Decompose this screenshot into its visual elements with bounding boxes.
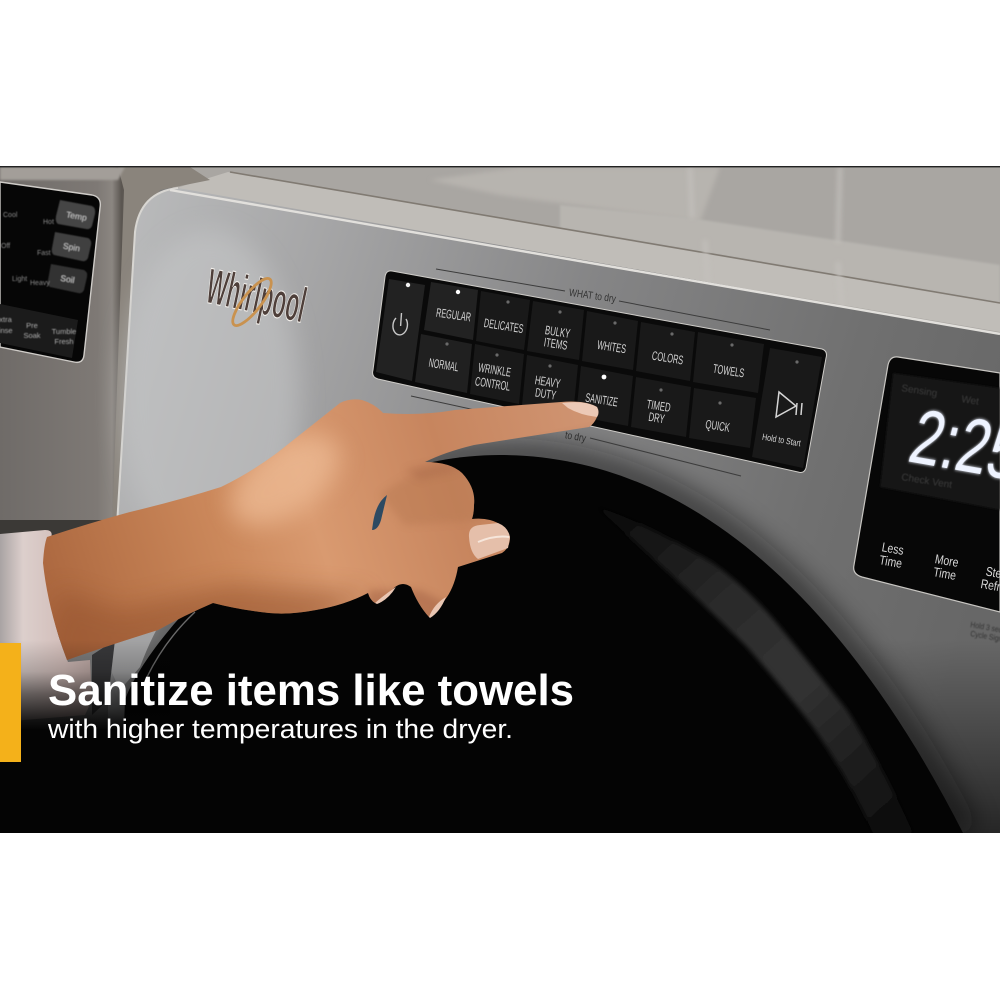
button labels: TOWELS (712, 363, 745, 381)
dryer front panel (108, 188, 1000, 833)
button labels: SANITIZE (584, 392, 619, 410)
Whirlpool logo (208, 268, 308, 327)
display buttons: Less (881, 540, 905, 558)
button labels: DUTY (534, 387, 557, 403)
pointing fingernail (562, 402, 598, 417)
button labels: REGULAR (435, 307, 472, 325)
Temp button (56, 200, 95, 229)
thin door line (147, 612, 195, 677)
display buttons (880, 542, 1000, 591)
display panel (854, 357, 1000, 645)
status labels: Check Vent (901, 472, 953, 491)
photo panel: dryer control close-up (0, 167, 1000, 833)
button labels: DELICATES (483, 317, 524, 337)
button labels (428, 307, 745, 435)
curled finger nails (429, 597, 446, 618)
button labels: NORMAL (428, 357, 460, 375)
marble countertop (170, 167, 1000, 340)
headline: Sanitize items like towels (48, 666, 574, 715)
washer lower buttons: Tumble (52, 327, 76, 336)
hand shadow (40, 585, 370, 690)
display buttons: Time (932, 565, 957, 583)
button labels: COLORS (651, 350, 684, 368)
how to dry legend (411, 396, 741, 476)
washer labels (1, 212, 54, 287)
button labels: BULKY (544, 325, 571, 342)
button labels: CONTROL (474, 376, 511, 394)
what to dry legend: WHAT to dry (568, 287, 617, 306)
washer lower buttons: Soak (23, 331, 41, 340)
washer labels: Fast (37, 250, 51, 257)
washer lower buttons (0, 315, 76, 346)
button labels: HEAVY (534, 374, 561, 392)
washer lower buttons: Pre (26, 321, 38, 330)
door black surround (120, 455, 963, 833)
thumb nail (469, 523, 510, 559)
washer lower buttons: Fresh (54, 337, 74, 346)
status labels (901, 383, 980, 491)
top crease highlight (170, 190, 1000, 334)
button tiles (376, 279, 822, 468)
Temp button: Temp (65, 209, 88, 223)
subheading: with higher temperatures in the dryer. (47, 714, 513, 744)
status labels: Sensing (901, 383, 938, 400)
Soil button: Soil (60, 273, 75, 285)
door rim (597, 507, 913, 833)
lit front patch beside door (112, 630, 156, 684)
neighbouring washer body (0, 167, 210, 640)
washer labels: Light (12, 276, 27, 283)
yellow accent bar (0, 643, 21, 762)
logo ring (231, 277, 273, 327)
hand (43, 399, 598, 660)
lower right vignette (873, 665, 1000, 833)
how to dry legend: to dry (564, 429, 587, 445)
washer labels: Cool (3, 212, 18, 219)
Spin button (52, 232, 91, 261)
hand highlight (224, 430, 344, 532)
button labels: QUICK (704, 419, 731, 435)
bottom left dark gradient (0, 640, 170, 730)
start icon (776, 392, 802, 417)
button labels: ITEMS (543, 337, 568, 353)
Soil button (48, 264, 87, 293)
bottom left black block (0, 729, 170, 833)
left highlight edge (116, 187, 178, 516)
button labels: DRY (647, 411, 666, 427)
hold to start label: Hold to Start (761, 432, 802, 449)
photo top edge (0, 166, 1000, 167)
sleeve (0, 530, 92, 722)
button labels: WHITES (596, 339, 627, 357)
main control panel (373, 271, 826, 472)
display buttons: Time (878, 553, 903, 571)
washer control panel (0, 182, 100, 362)
status labels: Wet (961, 394, 980, 408)
what to dry legend (436, 269, 770, 330)
washer labels: Heavy (30, 280, 50, 287)
button labels: TIMED (646, 399, 671, 415)
power icon (393, 313, 407, 335)
gap between fingers (372, 495, 387, 530)
washer labels: Off (1, 243, 10, 250)
door shadow on front (125, 455, 963, 833)
front sheen (112, 236, 302, 508)
button labels: WRINKLE (477, 362, 512, 380)
washer labels: Hot (43, 219, 54, 226)
Spin button: Spin (62, 241, 81, 253)
infographic canvas (0, 166, 1000, 833)
hold note (970, 622, 1000, 643)
photo panel: dryer control close-up: Whirlpool (202, 258, 311, 334)
indicator lights (406, 283, 799, 405)
display buttons: More (934, 552, 960, 570)
dark strip left of patch (92, 640, 115, 715)
